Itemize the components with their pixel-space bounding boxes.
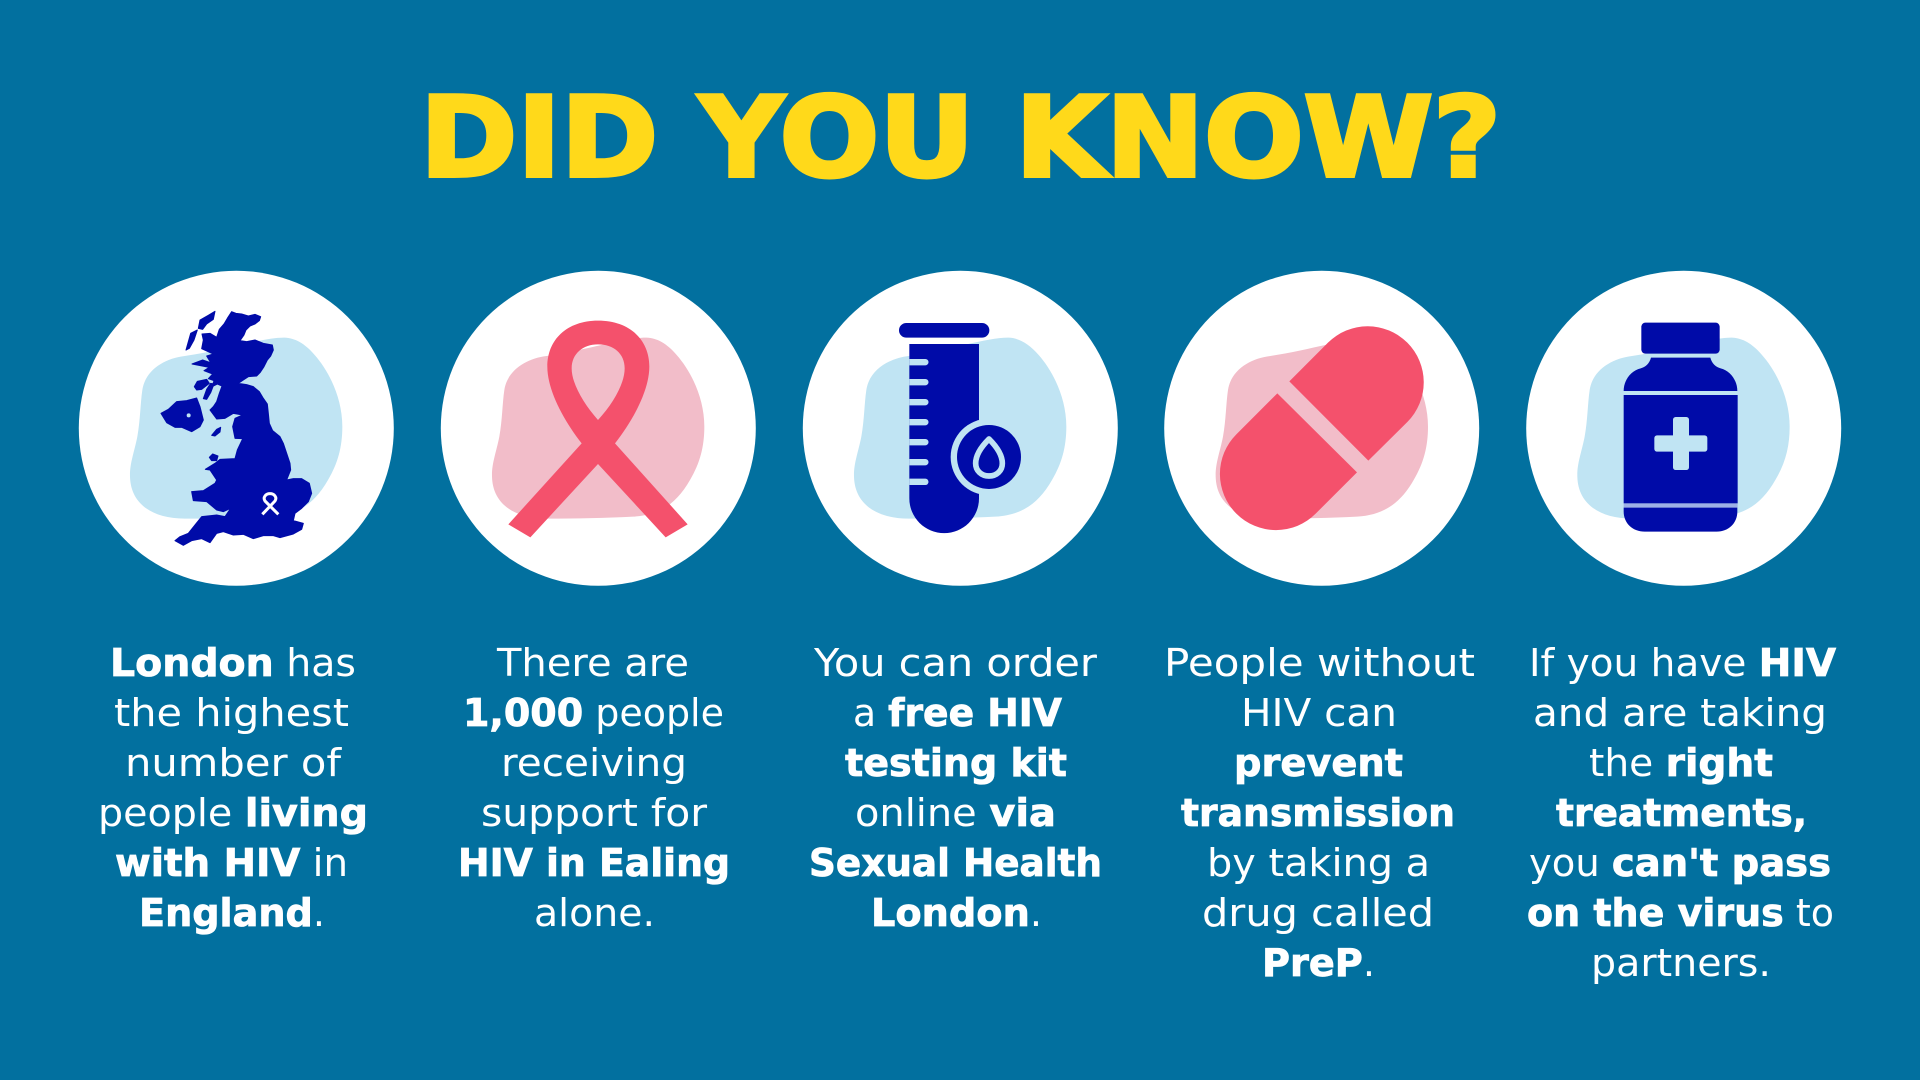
- text: treatment fact: on the virus to: [1527, 891, 1834, 936]
- bottle cap: [1641, 323, 1720, 354]
- text: PrEP fact: People without: [1164, 641, 1475, 686]
- text: PrEP fact: PreP.: [1262, 941, 1375, 986]
- text: treatment fact: and are taking: [1533, 691, 1827, 736]
- text: PrEP fact: prevent: [1234, 741, 1403, 786]
- text: London fact: the highest: [114, 691, 349, 736]
- white circle: [441, 271, 756, 586]
- background blob: [1216, 338, 1428, 519]
- icon: UK map on blob: [130, 311, 342, 545]
- text: London fact: England.: [139, 891, 325, 936]
- text: Ealing fact: support for: [481, 791, 707, 836]
- pill upper half: [1289, 326, 1424, 461]
- text: testing kit fact: [809, 641, 1102, 936]
- text: PrEP fact: transmission: [1181, 791, 1455, 836]
- text: testing kit fact: Sexual Health: [809, 841, 1102, 886]
- bottle label: [1624, 395, 1738, 503]
- pill lower half: [1220, 393, 1357, 530]
- tube body: [909, 344, 979, 533]
- text: treatment fact: [1527, 641, 1836, 986]
- text: PrEP fact: HIV can: [1241, 691, 1397, 736]
- text: Ealing fact: alone.: [534, 891, 655, 936]
- background blob: [492, 338, 704, 519]
- white circle: [803, 271, 1118, 586]
- white circle: [1526, 271, 1841, 586]
- text: London fact: with HIV in: [115, 841, 348, 886]
- text: testing kit fact: London.: [871, 891, 1042, 936]
- background blob: [130, 338, 342, 519]
- text: London fact: London has: [110, 641, 356, 686]
- text: Ealing fact: HIV in Ealing: [458, 841, 730, 886]
- red ribbon: [508, 321, 688, 537]
- title: DID YOU KNOW?: [420, 74, 1501, 203]
- icon: awareness ribbon on blob: [492, 321, 704, 537]
- white ribbon on London: [262, 494, 278, 514]
- panel: testing kit fact: [803, 271, 1118, 936]
- text: testing kit fact: testing kit: [845, 741, 1067, 786]
- background blob: [854, 338, 1066, 519]
- bottle shoulder: [1624, 358, 1737, 391]
- measurement ticks: [909, 359, 928, 485]
- text: London fact: [98, 641, 368, 936]
- panel: London map fact: [79, 271, 394, 936]
- panel: treatment fact: [1526, 271, 1841, 986]
- text: treatment fact: the right: [1589, 741, 1773, 786]
- white circle: [79, 271, 394, 586]
- text: treatment fact: partners.: [1591, 941, 1771, 986]
- text: treatment fact: If you have HIV: [1529, 641, 1836, 686]
- tube cap: [899, 323, 989, 338]
- cross: [1654, 417, 1707, 470]
- text: PrEP fact: by taking a: [1207, 841, 1430, 886]
- text: Ealing fact: 1,000 people: [463, 691, 724, 736]
- panel: PrEP fact: [1164, 271, 1479, 986]
- background blob: [1577, 338, 1790, 519]
- text: testing kit fact: online via: [855, 791, 1056, 836]
- icon: test tube on blob: [854, 323, 1066, 533]
- text: London fact: people living: [98, 791, 368, 836]
- bottle base: [1624, 508, 1737, 532]
- text: treatment fact: you can't pass: [1529, 841, 1831, 886]
- drop badge: [951, 419, 1027, 495]
- icon: pill on blob: [1216, 326, 1428, 530]
- text: London fact: number of: [125, 741, 343, 786]
- text: testing kit fact: You can order: [813, 641, 1097, 686]
- text: Ealing fact: [458, 641, 730, 936]
- panel: Ealing fact: [441, 271, 756, 936]
- text: testing kit fact: a free HIV: [853, 691, 1062, 736]
- icon: medicine bottle on blob: [1577, 323, 1790, 532]
- UK map silhouette: [161, 311, 312, 545]
- text: Ealing fact: receiving: [501, 741, 687, 786]
- text: Ealing fact: There are: [496, 641, 689, 686]
- text: PrEP fact: drug called: [1202, 891, 1434, 936]
- text: treatment fact: treatments,: [1556, 791, 1807, 836]
- bottle label bands: [1624, 391, 1738, 508]
- white circle: [1164, 271, 1479, 586]
- text: PrEP fact: [1164, 641, 1475, 986]
